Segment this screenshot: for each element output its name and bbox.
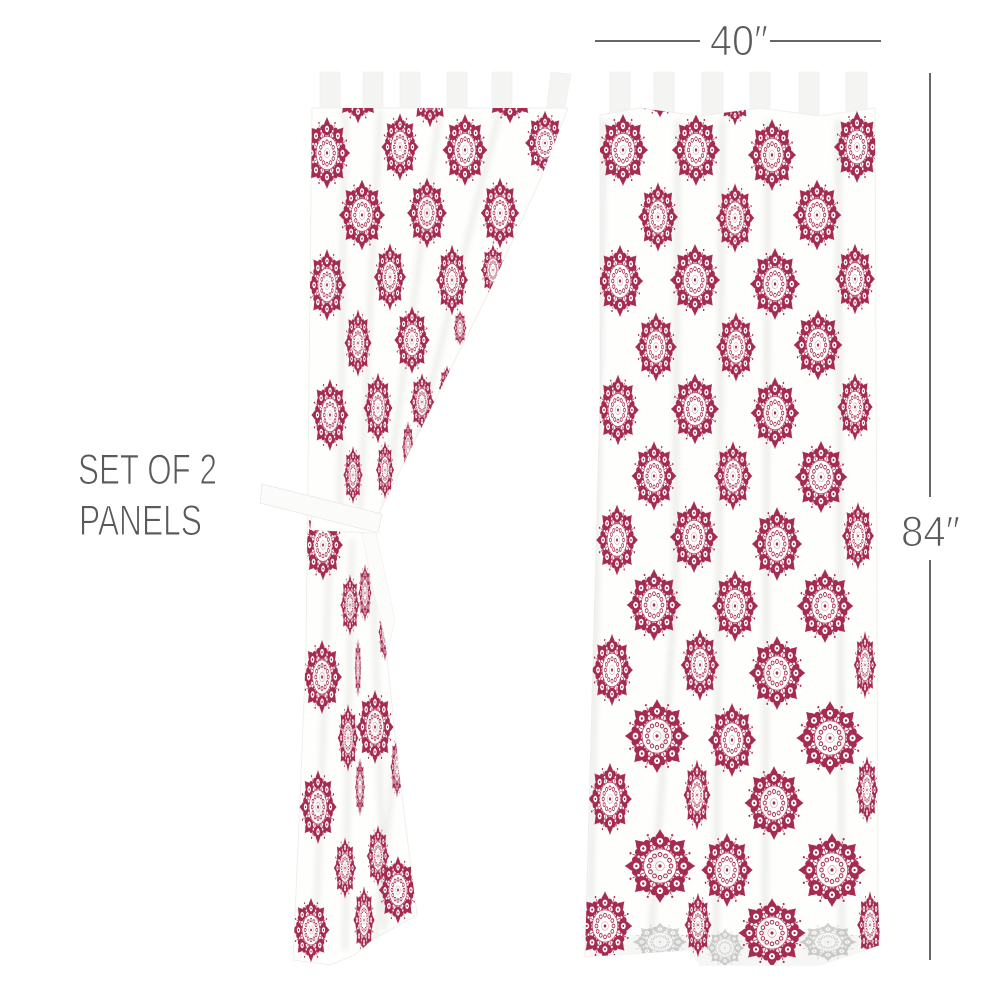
left panel fabric	[293, 108, 568, 965]
left panel pattern	[292, 53, 565, 962]
height dimension: 84 inches: 84″	[901, 508, 960, 556]
label: set of 2 panels: PANELS	[79, 497, 202, 545]
left curtain panel	[292, 53, 571, 965]
width dimension: 40 inches: 40″	[710, 17, 768, 65]
right panel pattern	[578, 61, 883, 970]
label: set of 2 panels: SET OF 2	[78, 446, 217, 494]
right curtain panel	[578, 61, 883, 970]
label: set of 2 panels	[78, 446, 217, 545]
right panel fabric	[585, 108, 880, 965]
left panel tabs	[320, 72, 571, 112]
tie-back band	[260, 484, 395, 650]
right panel tabs	[610, 72, 867, 118]
